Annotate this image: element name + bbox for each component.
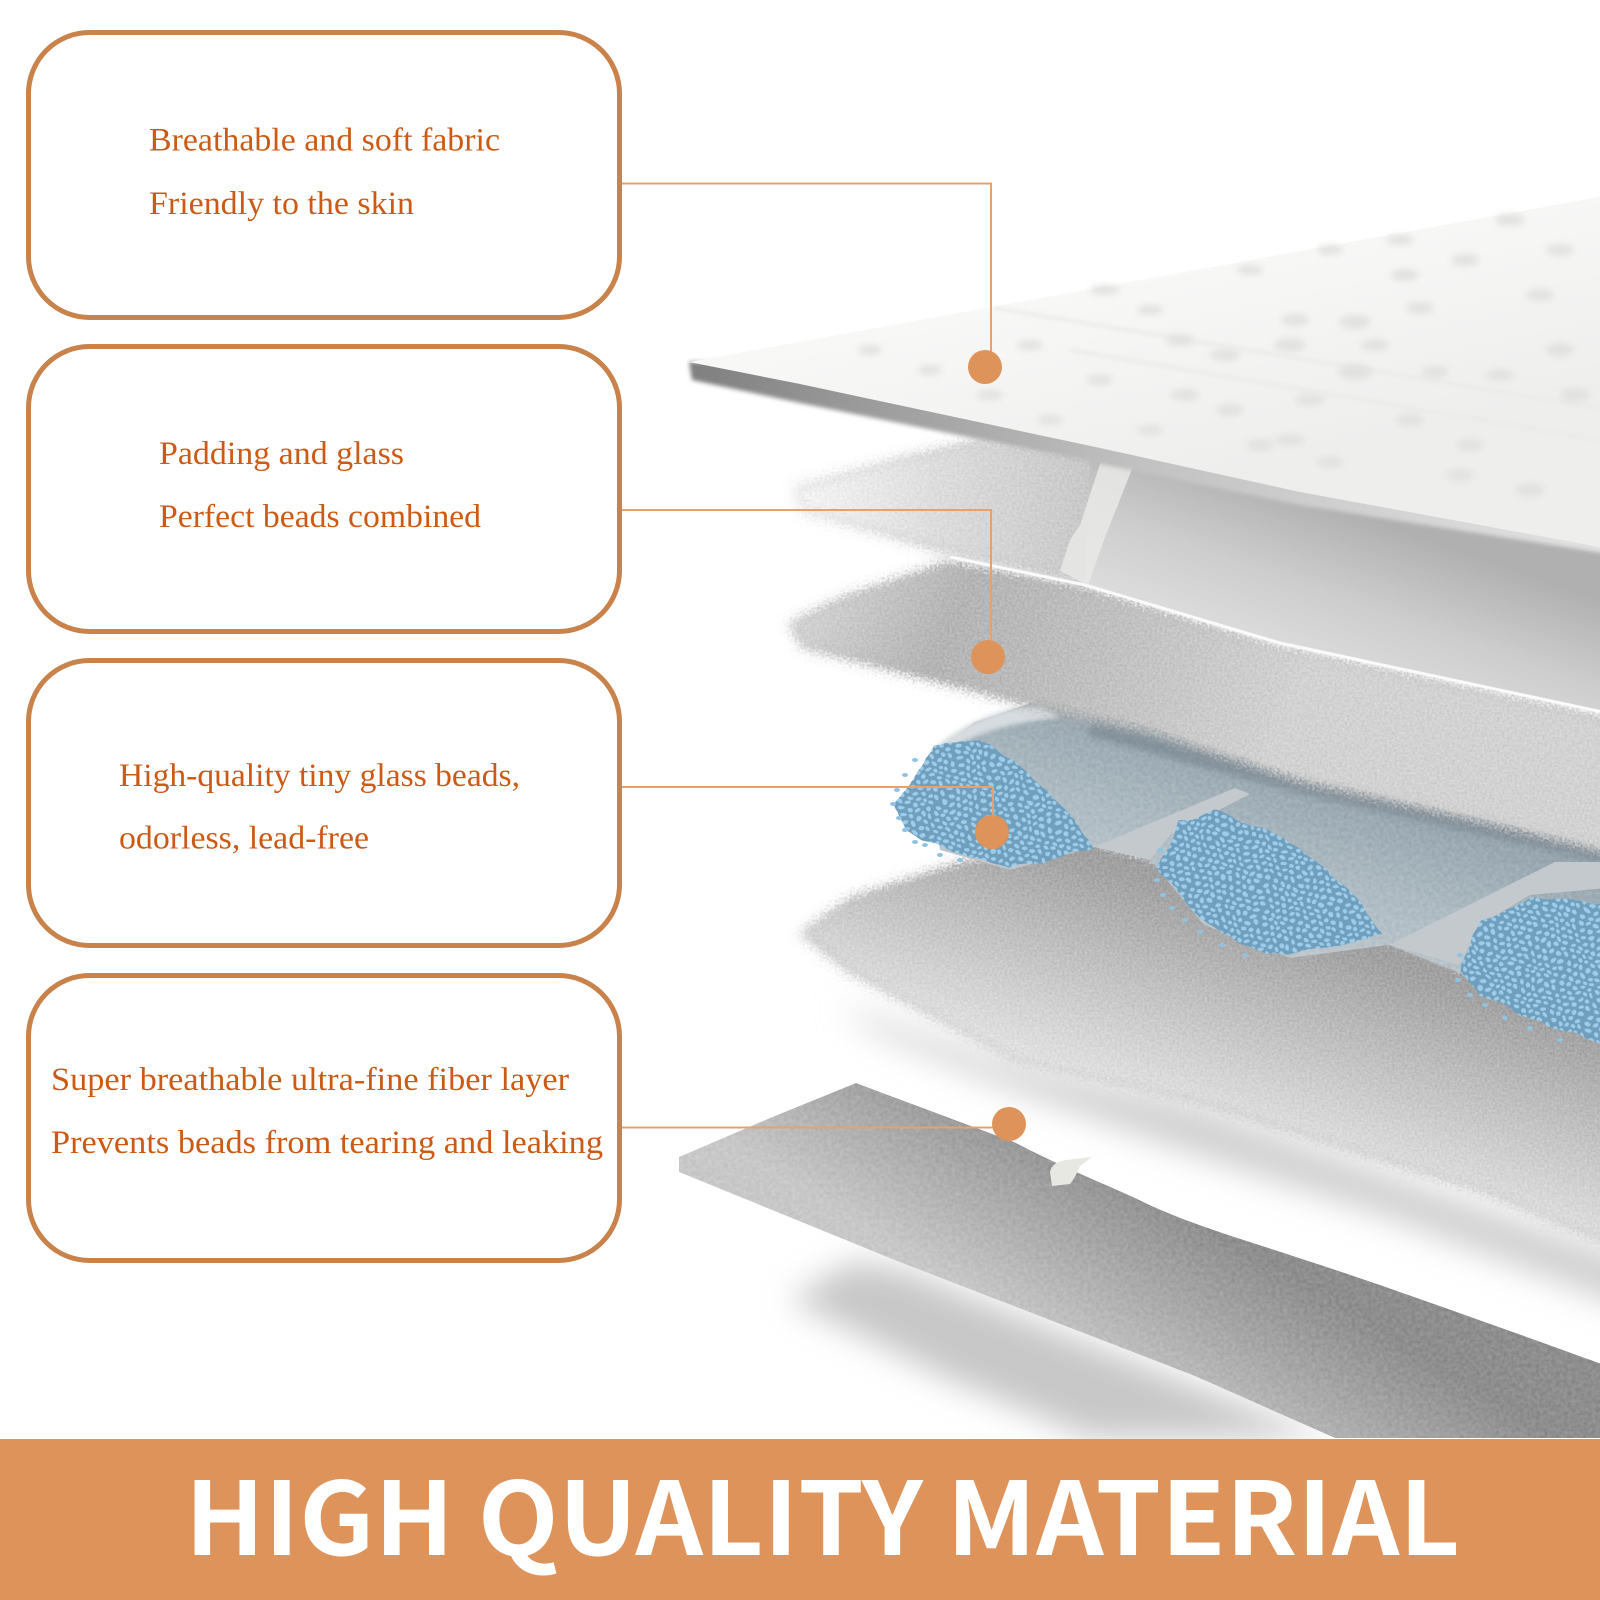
callout box 4: Prevents beads from tearing and leaking	[51, 1125, 603, 1161]
callout box 2: Padding and glass	[159, 436, 404, 472]
top sheet perforation dots	[858, 214, 1590, 497]
shadow under upper padding	[1090, 728, 1600, 862]
beads pocket 3	[1459, 898, 1600, 1060]
callout box 2	[28, 346, 620, 632]
scattered loose beads	[890, 758, 1563, 1042]
connector 2: padding	[622, 510, 1005, 674]
callout box 1: Breathable and soft fabric	[149, 122, 500, 158]
product illustration: exploded mattress-pad layers	[679, 186, 1600, 1438]
layer: top fabric sheet	[689, 186, 1600, 558]
callout box 4: Super breathable ultra-fine fiber layer	[51, 1062, 569, 1098]
callout box 1	[28, 32, 620, 318]
callout box 3: odorless, lead-free	[119, 820, 369, 856]
connector 1: top sheet	[622, 184, 1002, 384]
cover rim	[930, 705, 1060, 752]
top sheet seams	[994, 308, 1600, 447]
fabric tape	[1060, 461, 1134, 585]
callout box 3	[28, 660, 620, 946]
quilted cover	[925, 700, 1600, 1070]
shadow under bottom sheet	[790, 1262, 1330, 1438]
callout box 2: Perfect beads combined	[159, 499, 481, 535]
shade below lower padding	[838, 1005, 1600, 1320]
layer: top sheet edge	[689, 360, 1600, 562]
callout box 4	[28, 976, 620, 1260]
callout box 3: High-quality tiny glass beads,	[119, 758, 520, 794]
seam strip 2	[1389, 862, 1600, 965]
callout box 1: Friendly to the skin	[149, 186, 414, 222]
layer: inner white sleeve right	[1085, 456, 1600, 725]
small strap	[1050, 1157, 1092, 1186]
connector 3: glass beads	[622, 787, 1009, 849]
layer: inner white sleeve left	[790, 437, 1100, 585]
layer: bottom grey fiber sheet	[679, 1083, 1600, 1438]
sleeve edge highlight	[950, 557, 1600, 720]
bottom banner	[0, 1439, 1600, 1600]
layer: glass-bead quilted core	[890, 700, 1600, 1070]
banner title: HIGH QUALITY MATERIAL	[185, 1439, 1460, 1585]
beads pocket 1	[896, 740, 1094, 867]
seam strip 1	[1094, 788, 1250, 860]
layer: upper fluffy padding	[785, 559, 1600, 870]
layer: lower fluffy padding	[795, 835, 1600, 1270]
connector 4: fiber layer	[622, 1107, 1026, 1141]
beads pocket 2	[1158, 811, 1383, 954]
